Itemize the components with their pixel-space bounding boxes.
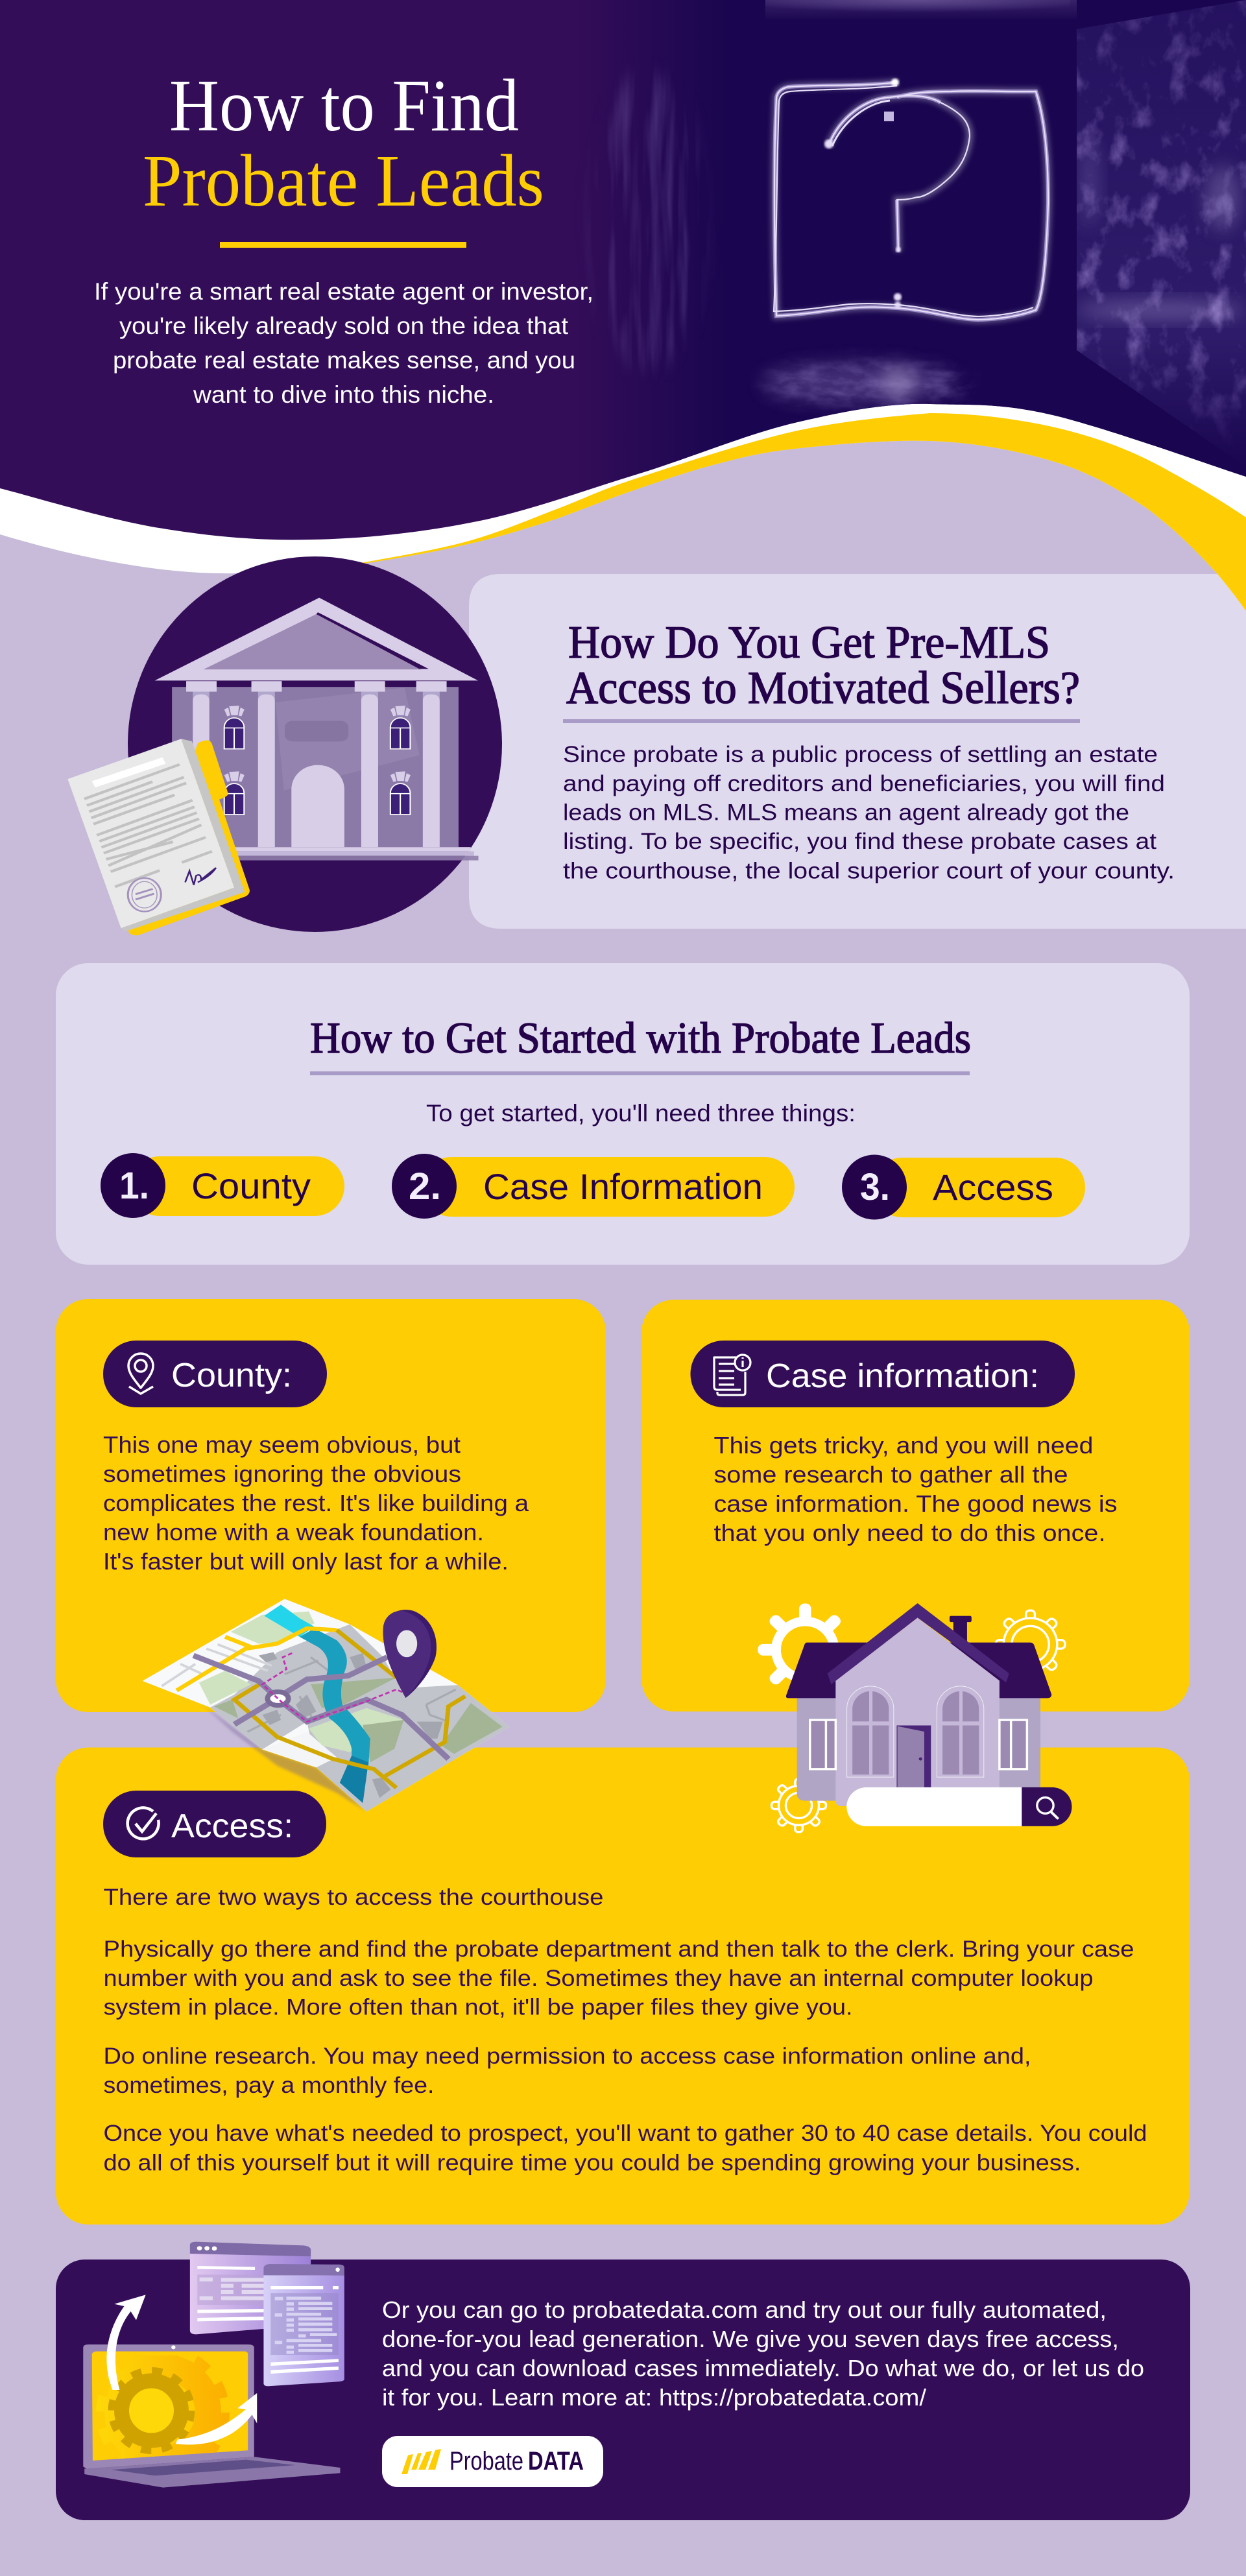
step 3: access: 3. xyxy=(860,1166,890,1208)
legal document in yellow folder xyxy=(67,739,250,935)
arrow: out of laptop xyxy=(176,2393,257,2445)
gear: solid white xyxy=(758,1604,852,1687)
heading: pre-MLS access: How Do You Get Pre-MLS xyxy=(568,617,1050,668)
step 2: case information: 2. xyxy=(409,1165,441,1208)
step 3: access xyxy=(842,1154,1085,1219)
panel: call to action xyxy=(56,2260,1190,2520)
illustration: folded city map with pin xyxy=(143,1599,510,1811)
call to action text: Or you can go to probatedata.com and try out our fully automated, xyxy=(382,2296,1107,2323)
illustration: laptop with gears, data windows and arrows xyxy=(83,2242,344,2488)
county badge: County: xyxy=(171,1357,292,1394)
logo: Probate DATA: DATA xyxy=(528,2447,584,2475)
side windows xyxy=(810,1720,1027,1769)
get started rule xyxy=(310,1071,970,1075)
access badge: Access: xyxy=(171,1807,293,1845)
county body text: It's faster but will only last for a while. xyxy=(103,1548,509,1575)
county body text xyxy=(103,1431,529,1575)
access body text: There are two ways to access the courthouse xyxy=(104,1885,603,1910)
hero intro text xyxy=(94,278,593,408)
icon: case document xyxy=(714,1355,750,1395)
wave: yellow band xyxy=(324,413,1246,611)
call to action text: and you can download cases immediately. Do what we do, or let us do xyxy=(382,2355,1144,2381)
step 1: county: County xyxy=(191,1165,311,1206)
hero intro text: probate real estate makes sense, and you xyxy=(113,347,575,374)
search bar xyxy=(846,1787,1072,1826)
access body text: Once you have what's needed to prospect, you'll want to gather 30 to 40 case details. You could xyxy=(104,2121,1147,2146)
wave: white band xyxy=(0,0,1246,611)
data windows xyxy=(190,2242,344,2386)
heading: pre-MLS access: Access to Motivated Sellers? xyxy=(566,663,1080,713)
hero intro text: you're likely already sold on the idea that xyxy=(119,313,569,339)
panel: county xyxy=(56,1299,606,1712)
access body text: do all of this yourself but it will require time you could be spending growing your business. xyxy=(104,2151,1081,2175)
call to action text: it for you. Learn more at: https://probatedata.com/ xyxy=(382,2384,926,2411)
county body text: complicates the rest. It's like building a xyxy=(103,1490,529,1516)
pre-MLS body text xyxy=(563,742,1175,883)
panel: pre-MLS access background xyxy=(469,574,1246,929)
call to action text xyxy=(382,2296,1144,2411)
hero background xyxy=(0,0,1246,540)
heading: get started: How to Get Started with Probate Leads xyxy=(310,1013,971,1062)
access body text: Physically go there and find the probate department and then talk to the clerk. Bring your case xyxy=(104,1937,1134,1962)
arrow: up to data window xyxy=(106,2295,146,2390)
call to action text: done-for-you lead generation. We give you seven days free access, xyxy=(382,2326,1119,2352)
courthouse building xyxy=(138,598,479,861)
step 2: case information xyxy=(392,1154,795,1219)
front door xyxy=(896,1725,931,1789)
logo: Probate DATA xyxy=(382,2436,603,2487)
icon: courthouse with legal document xyxy=(67,598,479,935)
access body text: system in place. More often than not, it'll be paper files they give you. xyxy=(104,1995,852,2020)
case information body text xyxy=(713,1432,1117,1546)
county body text: sometimes ignoring the obvious xyxy=(103,1461,461,1487)
logo: Probate DATA: Probate xyxy=(449,2447,523,2475)
hero intro text: If you're a smart real estate agent or investor, xyxy=(94,278,593,305)
hero photo: question mark drawn in light xyxy=(571,0,1246,493)
icon: check mark xyxy=(128,1807,159,1839)
icon: map pin xyxy=(383,1610,437,1698)
panel: how to get started xyxy=(56,963,1190,1265)
hero title: How to Find xyxy=(169,64,519,147)
pre-MLS body text: and paying off creditors and beneficiaries, you will find xyxy=(563,771,1165,796)
gears on laptop screen xyxy=(101,2351,224,2474)
case information badge: Case information: xyxy=(766,1357,1039,1395)
county body text: This one may seem obvious, but xyxy=(103,1431,461,1458)
case information body text: This gets tricky, and you will need xyxy=(713,1432,1094,1459)
illustration: house with gears and search bar xyxy=(758,1603,1072,1832)
panel: case information xyxy=(641,1300,1190,1711)
access body text xyxy=(104,1885,1147,2175)
hero title underline xyxy=(220,242,466,248)
step 1: county xyxy=(101,1153,344,1218)
icon: location pin xyxy=(128,1354,153,1394)
access body text: Do online research. You may need permission to access case information online and, xyxy=(104,2044,1031,2069)
pre-MLS body text: Since probate is a public process of settling an estate xyxy=(563,742,1158,767)
county body text: new home with a weak foundation. xyxy=(103,1519,484,1545)
arched windows xyxy=(224,706,245,749)
arched windows xyxy=(847,1686,984,1777)
access body text: number with you and ask to see the file. Sometimes they have an internal computer lookup xyxy=(104,1966,1094,1991)
pre-MLS body text: the courthouse, the local superior court of your county. xyxy=(563,859,1175,883)
step 3: access: Access xyxy=(933,1167,1053,1208)
pre-MLS body text: listing. To be specific, you find these probate cases at xyxy=(563,829,1156,854)
case information badge xyxy=(690,1341,1075,1407)
gear: outlined lower left xyxy=(772,1779,826,1832)
pre-MLS body text: leads on MLS. MLS means an agent already got the xyxy=(563,800,1129,825)
hero intro text: want to dive into this niche. xyxy=(193,381,494,408)
step 1: county: 1. xyxy=(119,1165,149,1207)
step 2: case information: Case Information xyxy=(483,1166,763,1207)
gear: outlined right xyxy=(996,1610,1065,1678)
access body text: sometimes, pay a monthly fee. xyxy=(104,2073,435,2098)
case information body text: case information. The good news is xyxy=(713,1490,1117,1517)
hero title: Probate Leads xyxy=(143,139,544,222)
panel: access xyxy=(56,1747,1190,2224)
heading rule xyxy=(563,719,1080,723)
case information body text: some research to gather all the xyxy=(713,1461,1068,1488)
laptop xyxy=(83,2344,340,2488)
heading: pre-MLS access xyxy=(566,617,1080,713)
hero title xyxy=(143,64,544,222)
county badge xyxy=(103,1341,327,1407)
get started intro: To get started, you'll need three things: xyxy=(426,1100,856,1127)
access badge xyxy=(103,1791,326,1857)
courthouse circle background xyxy=(128,556,502,932)
case information body text: that you only need to do this once. xyxy=(713,1520,1105,1546)
